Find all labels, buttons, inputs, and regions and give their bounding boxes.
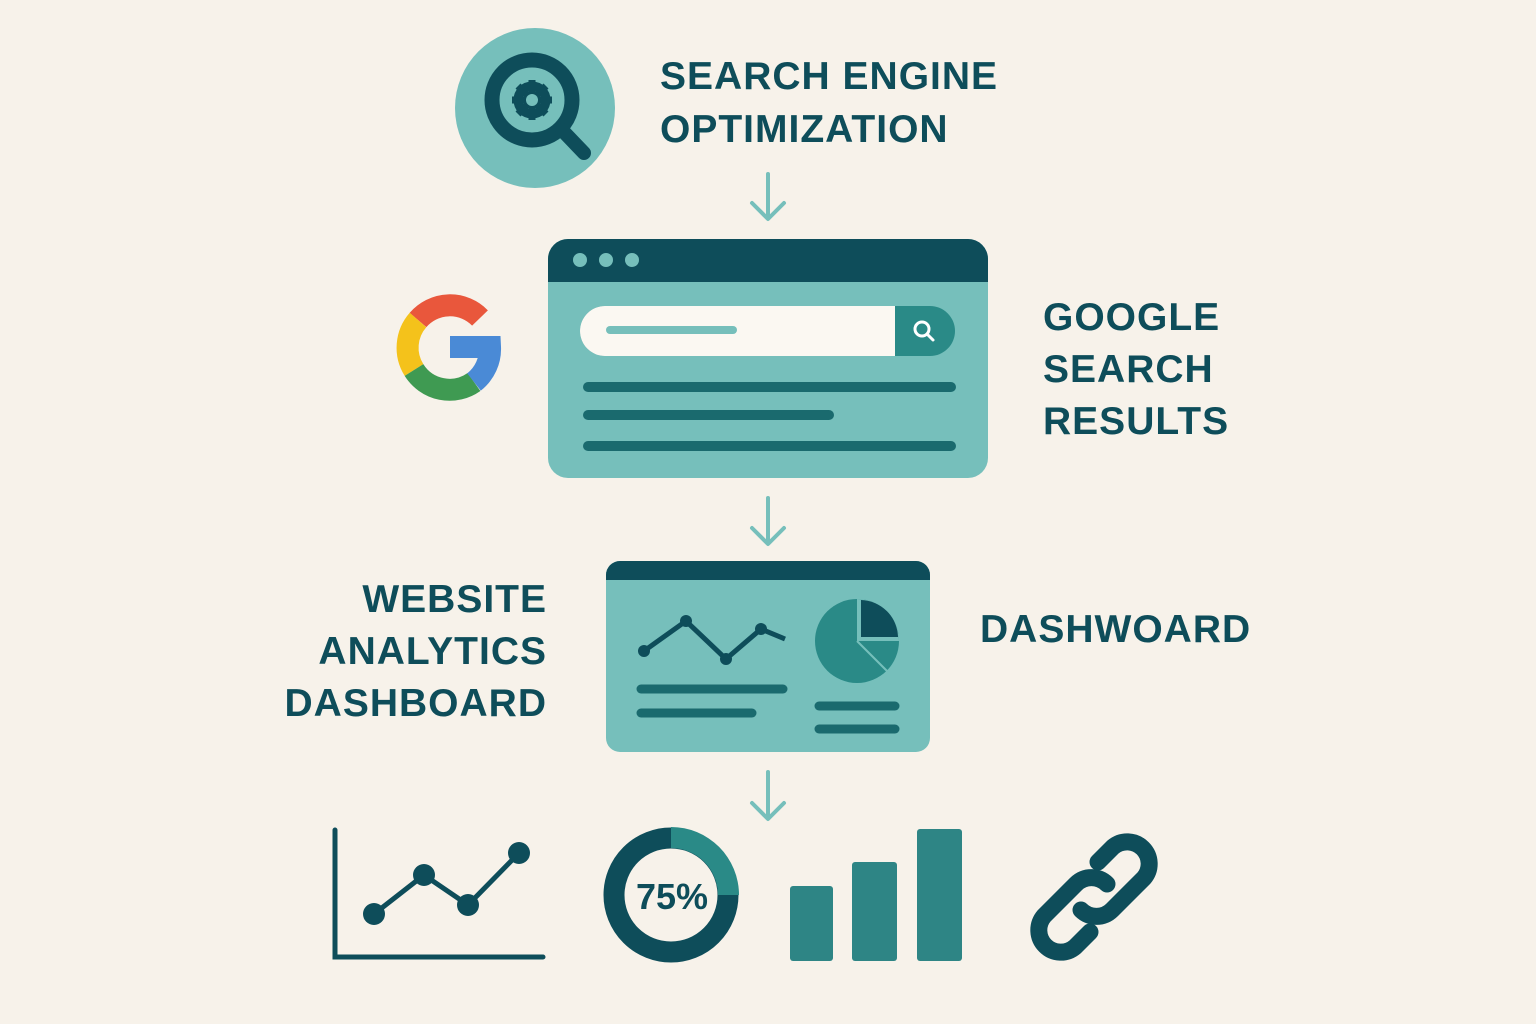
text: website analytics dashboard: ANALYTICS — [318, 630, 547, 673]
icon: google G — [408, 305, 490, 390]
panel: dashboard — [606, 561, 930, 752]
text: google search results: GOOGLE — [1043, 296, 1220, 339]
text: website analytics dashboard: DASHBOARD — [284, 682, 547, 725]
text: website analytics dashboard: WEBSITE — [362, 578, 547, 621]
icon: SEO magnifier — [455, 28, 615, 188]
icon: line chart — [335, 830, 543, 957]
text: google search results: RESULTS — [1043, 400, 1229, 443]
panel: browser search results — [548, 239, 988, 478]
icon: link — [1039, 842, 1149, 952]
arrow 3 — [752, 772, 784, 819]
title: search engine optimization: SEARCH ENGINE — [660, 55, 998, 98]
text: dashwoard: DASHWOARD — [980, 608, 1251, 651]
arrow 1 — [752, 174, 784, 219]
arrow 2 — [752, 498, 784, 544]
title: search engine optimization: OPTIMIZATION — [660, 108, 949, 151]
text: google search results: SEARCH — [1043, 348, 1214, 391]
icon: donut 75% — [614, 827, 739, 952]
icon: donut 75%: 75% — [636, 876, 708, 917]
bar chart — [790, 829, 962, 961]
